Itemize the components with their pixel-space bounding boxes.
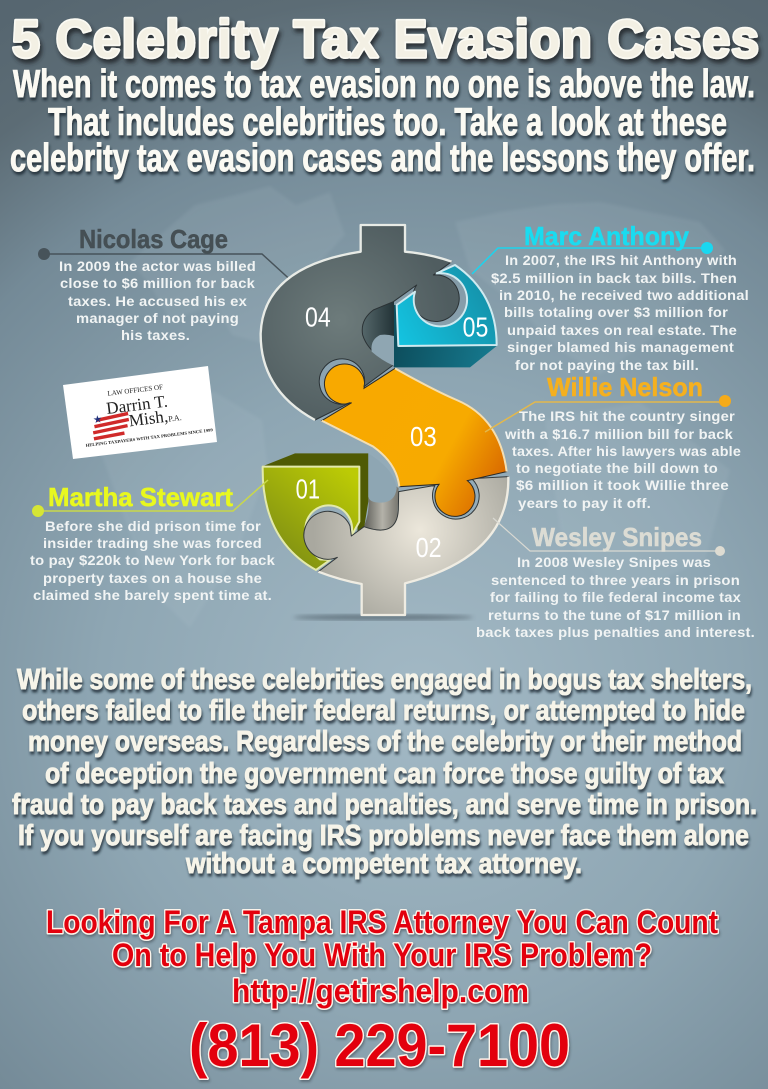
law office logo: ★ [93,414,103,425]
label 03: 03 [410,421,437,452]
law office logo: HELPING TAXPAYERS WITH TAX PROBLEMS SINCE 1999 [85,427,214,448]
callout: Willie Nelson: The IRS hit the country singer [519,409,736,424]
dollar sign puzzle [261,225,508,620]
ground shadow [293,614,473,620]
label 02: 02 [416,532,442,563]
callout: Martha Stewart: Before she did prison time for [45,519,262,534]
callout: Martha Stewart: claimed she barely spent time at. [33,588,272,603]
callout: Martha Stewart [30,480,275,603]
call to action: On to Help You With Your IRS Problem? [112,937,652,973]
callout: Wesley Snipes [476,518,755,640]
law office logo: LAW OFFICES OF [107,383,163,398]
callout: Martha Stewart: insider trading she was forced [43,536,262,551]
call to action [46,904,718,1079]
law office logo: Darrin T. [105,392,169,418]
callout: Martha Stewart: to pay $220k to New York for back [30,553,275,568]
callout: Marc Anthony: unpaid taxes on real estate. The [507,323,737,338]
closing paragraph: without a competent tax attorney. [185,848,582,880]
callout: Marc Anthony: singer blamed his management [507,340,734,355]
callout: Wesley Snipes: In 2008 Wesley Snipes was [517,555,711,570]
extrusion: teal block [394,305,497,367]
callout: Willie Nelson: taxes. After his lawyers was able [512,444,741,459]
extrusion: lower [362,487,399,535]
extrusion: olive block [262,453,368,535]
piece 03 [322,364,507,516]
callout: Martha Stewart: property taxes on a house she [43,571,262,586]
callout: Nicolas Cage: In 2009 the actor was billed [59,259,256,274]
piece 05 [397,265,497,346]
callout: Marc Anthony: Marc Anthony [524,221,690,251]
label 04: 04 [305,301,331,332]
callout: Willie Nelson [485,372,741,511]
law office logo [63,366,217,459]
extrusion: upper dark curve [361,299,394,367]
call to action: http://getirshelp.com [232,973,529,1009]
callout: Marc Anthony: $2.5 million in back tax bills. Then [491,271,737,286]
callout: Wesley Snipes: returns to the tune of $17 million in [488,608,741,623]
closing paragraph [12,664,757,880]
callout: Willie Nelson: years to pay it off. [518,496,651,511]
call to action: (813) 229-7100 [189,1012,570,1079]
callout: Marc Anthony: for not paying the tax bill. [515,358,699,373]
label 01: 01 [296,474,320,505]
callout: Wesley Snipes: back taxes plus penalties and interest. [476,625,755,640]
dollar hole: lower [368,453,397,503]
dollar hole: upper [371,335,394,366]
world map backdrop [100,186,730,628]
piece 01 [263,467,359,570]
intro text [10,63,755,180]
callout: Wesley Snipes: sentenced to three years in prison [491,573,740,588]
callout: Willie Nelson: $6 million it took Willie three [516,478,729,493]
piece 02 [304,477,508,615]
callout: Marc Anthony: bills totaling over $3 million for [504,305,729,320]
callout: Nicolas Cage: his taxes. [121,328,190,343]
callout: Marc Anthony: in 2010, he received two additional [499,288,749,303]
piece 04 [261,225,459,420]
callout: Willie Nelson: to negotiate the bill down to [516,461,718,476]
callout: Nicolas Cage: Nicolas Cage [79,224,228,254]
callout: Marc Anthony [472,221,749,373]
label 05: 05 [463,312,488,343]
callout: Marc Anthony: In 2007, the IRS hit Anthony with [505,253,737,268]
callout: Wesley Snipes: Wesley Snipes [532,522,702,552]
callout: Nicolas Cage: taxes. He accused his ex [68,294,247,309]
callout: Wesley Snipes: for failing to file federal income tax [490,590,741,605]
callout: Nicolas Cage: manager of not paying [76,311,239,326]
callout: Nicolas Cage [38,224,296,343]
callout: Nicolas Cage: close to $6 million for back [60,276,255,291]
callout: Willie Nelson: Willie Nelson [547,372,703,402]
law office logo: Mish,P.A. [128,405,182,430]
callout: Willie Nelson: with a $16.7 million bill for back [504,427,733,442]
callout: Martha Stewart: Martha Stewart [48,482,233,512]
